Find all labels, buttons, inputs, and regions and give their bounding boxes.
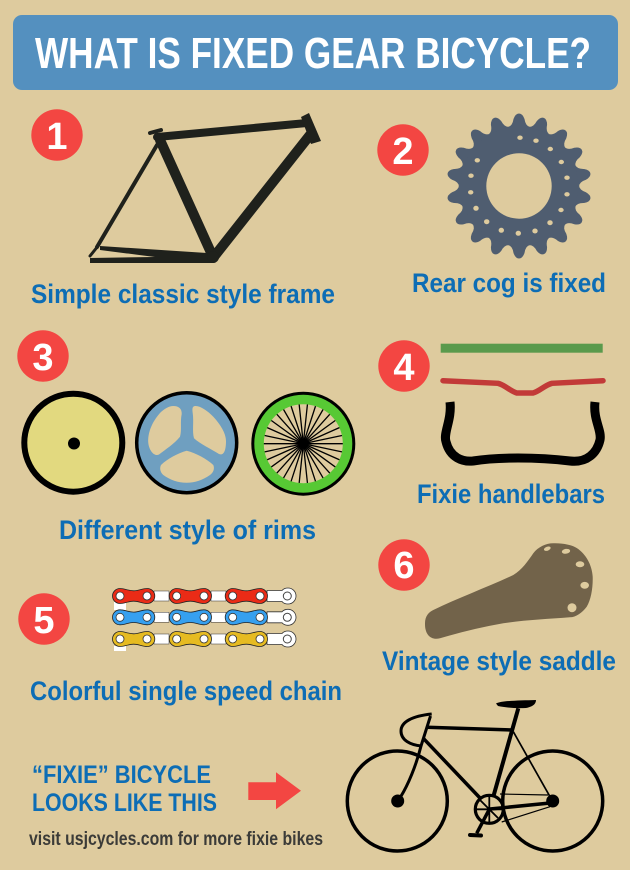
caption: Colorful single speed chain: [30, 676, 342, 706]
badge 4: 4: [393, 347, 415, 389]
badge 3: 3: [32, 337, 54, 379]
callout: fixie bicycle: LOOKS LIKE THIS: [32, 789, 217, 817]
badge 3: [17, 330, 69, 382]
panel: 5 chain: [18, 588, 342, 706]
badge 6: [378, 539, 430, 591]
title banner: [13, 15, 618, 90]
panel: 6 saddle: [378, 539, 616, 676]
panel: 2 cog: [377, 114, 606, 298]
panel: 3 rims: [17, 330, 354, 545]
badge 5: 5: [33, 600, 55, 642]
icon: black drop bar: [445, 402, 600, 461]
badge 5: [18, 593, 70, 645]
icon: colored chains: [112, 588, 296, 651]
icon: rear cog: [446, 114, 592, 258]
icon: complete bicycle silhouette: [347, 700, 603, 851]
badge 1: [31, 109, 83, 161]
callout: fixie bicycle: [32, 761, 217, 817]
icon: red riser bar: [443, 381, 603, 393]
caption: Fixie handlebars: [417, 479, 605, 509]
footer note: visit usjcycles.com for more fixie bikes: [29, 829, 323, 850]
badge 1: 1: [46, 116, 68, 158]
panel: 4 handlebars: [378, 340, 605, 509]
icon: tri-spoke rim: [137, 393, 237, 493]
badge 6: 6: [393, 545, 415, 587]
panel: 1 frame: [31, 109, 335, 309]
badge 2: [377, 124, 429, 176]
callout: fixie bicycle: “FIXIE” BICYCLE: [32, 761, 211, 789]
caption: Rear cog is fixed: [412, 268, 606, 298]
arrow: [248, 772, 301, 809]
badge 4: [378, 340, 430, 392]
icon: solid disc rim: [24, 394, 122, 492]
icon: spoked green rim: [253, 393, 354, 494]
caption: Different style of rims: [59, 515, 316, 545]
icon: straight green bar: [441, 344, 603, 353]
badge 2: 2: [392, 131, 414, 173]
icon: bicycle frame: [90, 113, 321, 263]
icon: saddle: [425, 543, 593, 639]
caption: Simple classic style frame: [31, 279, 335, 309]
